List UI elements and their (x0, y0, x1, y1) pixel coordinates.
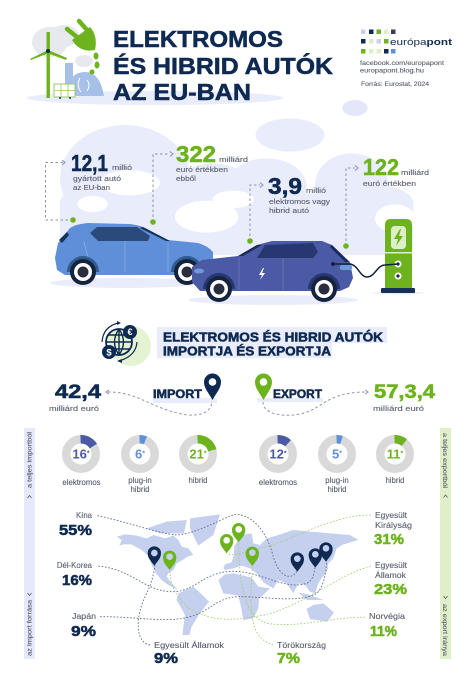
donut labels: elektromos (259, 478, 297, 487)
title: ELEKTROMOS (113, 26, 283, 52)
export target: Egyesült Királyság (374, 511, 412, 548)
donut: import hybrid 21 (183, 439, 213, 469)
donut labels: elektromos (62, 478, 101, 487)
donut: export electric 12: 12 (269, 446, 284, 462)
connector: 3,9 (247, 182, 263, 244)
donut: export electric 12: * (284, 450, 287, 458)
stat: 322 billion euro (176, 141, 248, 183)
stat: 12,1 million cars: az EU-ban (73, 183, 110, 192)
export target: Egyesült Államok: Államok (375, 571, 406, 580)
donut labels: plug-in (128, 476, 152, 485)
stat: 122 billion euro: milliárd (401, 168, 429, 177)
export target: Egyesült Királyság: 31% (374, 531, 404, 548)
import summary (49, 374, 221, 415)
import source: Egyesült Államok (154, 641, 224, 667)
donut labels: hibrid (188, 476, 208, 485)
stat: 3,9 million electric or hybrid: hibrid autó (269, 206, 309, 215)
donut: export electric 12 (263, 439, 293, 469)
import source: Dél-Korea: 16% (62, 572, 92, 589)
ground shadows under cars (50, 278, 424, 305)
donut: import electric 16: * (87, 450, 90, 458)
export target: Norvégia (369, 612, 406, 640)
illustration: wind turbine, plug, power plant and solar panel (27, 21, 283, 105)
donut: import plug-in 6: 6 (135, 446, 142, 462)
stat: 12,1 million cars (71, 150, 132, 192)
stat: 12,1 million cars: 12,1 (71, 150, 108, 176)
contact links (360, 60, 444, 74)
donut: export hybrid 11: * (401, 450, 404, 458)
donut labels: hibrid (385, 476, 405, 485)
import summary: 42,4 (55, 382, 102, 403)
heading: import and export: ELEKTROMOS ÉS HIBRID AUTÓK (163, 330, 384, 344)
donut: import plug-in 6: * (142, 450, 145, 458)
connector: 12,1 (46, 160, 76, 223)
donut: export hybrid 11: 11 (387, 446, 401, 462)
donut: import hybrid 21: 21 (189, 446, 204, 462)
export target: Egyesült Államok: Egyesült (375, 561, 408, 570)
heading: import and export (157, 327, 387, 358)
title: ÉS HIBRID AUTÓK (113, 52, 333, 79)
logo: európapont (361, 30, 453, 54)
world map (117, 514, 358, 635)
import source: Japán (71, 612, 96, 640)
donut: import electric 16 (66, 439, 96, 469)
title: AZ EU-BAN (113, 79, 251, 105)
stat: 322 billion euro: milliárd (219, 155, 248, 164)
charging station with cable (331, 219, 415, 293)
source: Forrás: Eurostat, 2024 (361, 81, 430, 88)
side bar: import: a teljes importból (26, 431, 34, 488)
car: light blue (55, 223, 213, 285)
stat: 3,9 million electric or hybrid: elektromos vagy (269, 197, 330, 206)
map pins (148, 523, 333, 572)
stat: 122 billion euro (363, 154, 429, 188)
icon: globe with currencies: € (127, 327, 133, 337)
stat: 12,1 million cars: millió (112, 163, 132, 172)
donut labels: plug-in (325, 476, 349, 485)
import source: Egyesült Államok: Egyesült Államok (154, 641, 224, 650)
import source: Kína: 55% (59, 522, 92, 539)
heading: import and export: IMPORTJA ÉS EXPORTJA (163, 344, 332, 358)
export target: Törökország: 7% (277, 650, 300, 667)
donut: export plug-in 5: * (339, 450, 342, 458)
export summary: 57,3,4 (374, 382, 435, 403)
donut labels: hibrid (327, 485, 347, 494)
import source: Dél-Korea (57, 561, 93, 589)
import source: Egyesült Államok: 9% (154, 650, 178, 667)
side bar: import: az import forrása (26, 600, 34, 656)
donut: export hybrid 11 (380, 439, 410, 469)
contact links: europapont.blog.hu (360, 68, 425, 74)
stat: 3,9 million electric or hybrid: millió (306, 186, 326, 195)
export summary: milliárd euró (373, 404, 424, 413)
export target: Egyesült Államok: 23% (374, 581, 407, 598)
stat: 122 billion euro: euró értékben (363, 179, 416, 188)
donut: import hybrid 21: * (204, 450, 207, 458)
export target: Törökország (277, 641, 326, 667)
donut: export plug-in 5: 5 (332, 446, 339, 462)
title (113, 26, 333, 105)
export target: Törökország: Törökország (277, 641, 326, 650)
import summary: IMPORT (153, 387, 203, 401)
export target: Egyesült Királyság: Egyesült (375, 511, 408, 520)
icon: globe with currencies: $ (106, 348, 112, 358)
import source: Kína (59, 511, 93, 539)
donut labels (62, 476, 405, 494)
stat: 322 billion euro: 322 (176, 141, 216, 167)
export target: Norvégia: 11% (370, 623, 397, 640)
import source: Japán: Japán (72, 612, 96, 621)
export summary: EXPORT (273, 387, 323, 401)
background clouds (60, 100, 415, 255)
stat: 12,1 million cars: gyártott autó (73, 174, 121, 183)
import source: Dél-Korea: Dél-Korea (57, 561, 93, 570)
side bar: export: az export iránya (441, 604, 448, 656)
logo: európapont: európa pont (390, 37, 453, 48)
side bar: export: a teljes exportból (441, 433, 448, 489)
import summary: milliárd euró (49, 404, 99, 413)
export target: Egyesült Királyság: Királyság (375, 521, 412, 530)
export summary (255, 374, 435, 415)
connector: 122 (343, 166, 358, 249)
donut: export plug-in 5 (322, 439, 352, 469)
stat: 3,9 million electric or hybrid (268, 173, 330, 215)
side bar: import (24, 428, 35, 659)
route lines (97, 514, 371, 645)
import source: Kína: Kína (76, 511, 93, 520)
connector: 322 (150, 152, 173, 225)
icon: globe with currencies (102, 321, 151, 366)
export target: Norvégia: Norvégia (369, 612, 406, 621)
donut: import plug-in 6 (125, 439, 155, 469)
stat: 3,9 million electric or hybrid: 3,9 (268, 173, 302, 199)
contact links: facebook.com/europapont (360, 60, 444, 67)
import source: Japán: 9% (71, 623, 96, 640)
side bar: export (440, 428, 451, 659)
donut: import electric 16: 16 (72, 446, 87, 462)
car: dark blue electric (192, 241, 353, 302)
export target: Egyesült Államok (374, 561, 408, 598)
stat: 322 billion euro: ebből (176, 174, 196, 183)
stat: 122 billion euro: 122 (363, 154, 399, 180)
stat: 322 billion euro: euró értékben (176, 165, 228, 174)
donut labels: hibrid (130, 485, 150, 494)
